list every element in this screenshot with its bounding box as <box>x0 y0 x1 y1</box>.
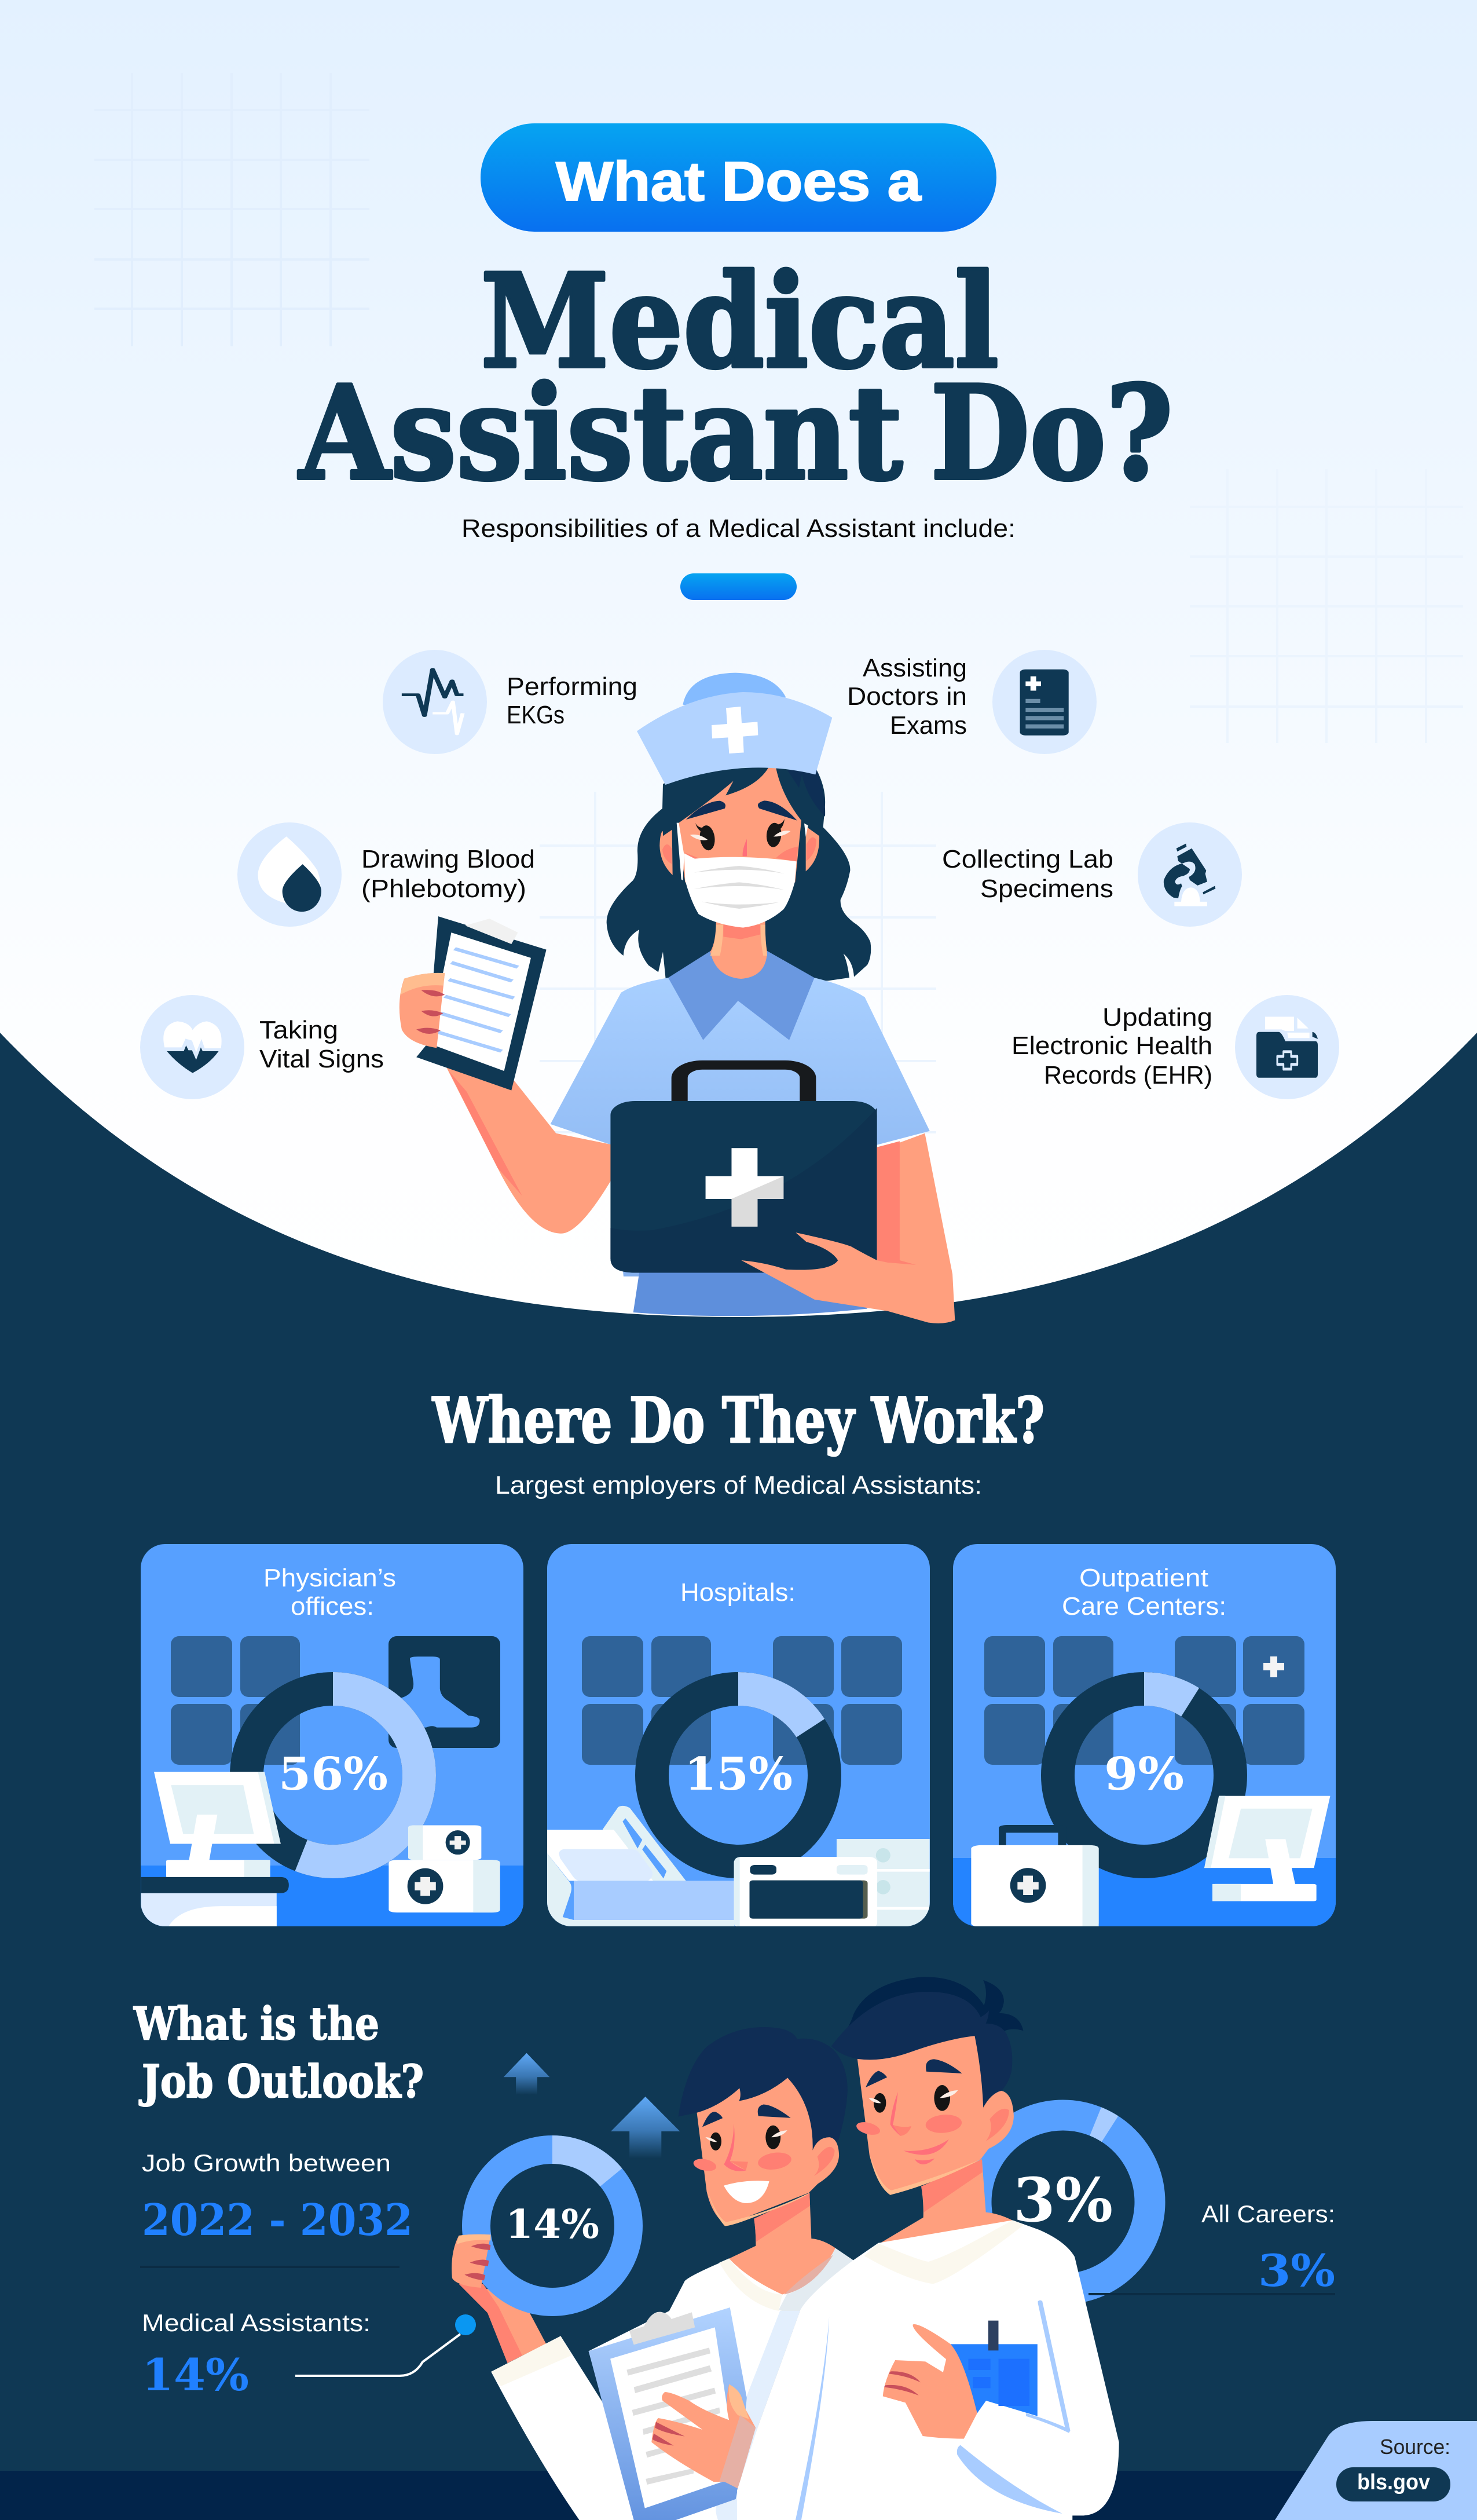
coat pocket and pen <box>951 2300 1070 2433</box>
donut chart 15% <box>652 1689 824 1861</box>
donut chart 3% <box>950 2089 1176 2315</box>
heading: What is the Job Outlook?: What is the <box>133 1998 379 2050</box>
nurse face <box>677 766 801 882</box>
title: Medical Assistant Do? <box>298 246 1173 509</box>
large arrow <box>611 2097 680 2159</box>
medical bag <box>610 1065 877 1272</box>
file tray <box>547 1806 735 1928</box>
label: Collecting Lab Specimens <box>942 845 1113 903</box>
nurse collar <box>668 951 815 1040</box>
left assistant sleeve <box>491 2336 636 2520</box>
source box <box>1275 2421 1477 2520</box>
panel label: Hospitals: Hospitals: <box>680 1578 796 1607</box>
label: Assisting Doctors in Exams: Doctors in <box>847 682 967 711</box>
title: Medical Assistant Do?: Medical <box>481 246 999 397</box>
value 9%: 9% <box>1104 1748 1184 1801</box>
title: Medical Assistant Do?: Assistant <box>298 357 903 509</box>
nurse hair <box>607 759 871 981</box>
label: Assisting Doctors in Exams: Exams <box>890 711 967 740</box>
panel: physician's offices <box>141 1544 523 1929</box>
foot x-ray picture <box>389 1636 500 1748</box>
label: Taking Vital Signs: Taking <box>259 1016 338 1044</box>
label: Performing EKGs: Performing <box>507 672 637 701</box>
small arrow <box>504 2053 549 2095</box>
connector line and dot <box>295 2314 476 2376</box>
donut chart 56% <box>247 1689 419 1861</box>
title: Medical Assistant Do?: Do? <box>930 357 1173 509</box>
nurse hat <box>637 673 832 785</box>
subtitle: Responsibilities of a Medical Assistant include: <box>461 514 1016 543</box>
value: 2022 - 2032: 2022 - 2032 <box>142 2195 413 2245</box>
heading: What is the Job Outlook?: Job Outlook? <box>139 2055 424 2108</box>
nurse ears <box>659 830 673 875</box>
nurse skirt <box>633 1270 867 1316</box>
value 15%: 15% <box>684 1748 793 1801</box>
filing cabinet <box>837 1839 930 1928</box>
nurse left arm <box>445 1064 613 1234</box>
donut chart 14% <box>476 2150 629 2302</box>
cross tile <box>1263 1656 1284 1677</box>
left assistant head, neck and chest <box>678 2027 848 2295</box>
donut chart 14%: 14% <box>505 2201 599 2248</box>
label: Collecting Lab Specimens: Collecting Lab <box>942 845 1113 873</box>
nurse illustration <box>400 673 955 1323</box>
office desk and monitor <box>141 1772 289 1926</box>
left assistant raised hand <box>452 2234 490 2288</box>
clipboard <box>589 2307 747 2520</box>
icon: collecting lab specimens <box>1138 822 1242 927</box>
label: Updating Electronic Health Records (EHR): Electronic Health <box>1011 1032 1212 1060</box>
icon: assisting doctors <box>992 650 1097 754</box>
source box: bls.gov <box>1357 2470 1430 2495</box>
panel label: Outpatient Care Centers <box>1062 1564 1226 1621</box>
medical bag <box>971 1825 1099 1927</box>
text: all careers: All Careers: <box>1201 2200 1335 2228</box>
icon: performing EKGs <box>383 650 487 754</box>
right assistant neck and head <box>831 1977 1025 2261</box>
heading pill: What Does a <box>481 123 996 232</box>
small accent pill <box>680 573 797 600</box>
label: Drawing Blood (Phlebotomy) <box>361 845 535 903</box>
panel label: Physician's offices: offices: <box>291 1592 374 1621</box>
source box: Source: <box>1380 2435 1450 2459</box>
label: Updating Electronic Health Records (EHR): Records (EHR) <box>1044 1061 1212 1089</box>
illustration: two medical assistants <box>452 1977 1119 2520</box>
panel label: Outpatient Care Centers: Care Centers: <box>1062 1592 1226 1621</box>
panel: outpatient care centers <box>953 1544 1336 1928</box>
heading: What is the Job Outlook? <box>133 1998 424 2108</box>
icon: updating EHR <box>1235 995 1339 1099</box>
left assistant forearm <box>459 2282 546 2363</box>
medical boxes <box>389 1825 500 1912</box>
left assistant holding hand <box>651 2384 756 2489</box>
subheading: largest employers: Largest employers of Medical Assistants: <box>495 1471 982 1499</box>
label: Taking Vital Signs: Vital Signs <box>259 1045 384 1073</box>
heading: Where Do They Work?: Where Do They Work? <box>432 1384 1044 1457</box>
label: Performing EKGs <box>507 672 637 729</box>
nurse neck and face <box>637 673 832 979</box>
text: job growth between: Job Growth between <box>142 2149 391 2177</box>
panel: hospitals <box>547 1544 930 1928</box>
donut chart 9% <box>1058 1689 1230 1861</box>
nurse clipboard <box>416 916 547 1091</box>
label: Assisting Doctors in Exams: Assisting <box>863 654 967 682</box>
donut chart 3%: 3% <box>1013 2164 1113 2236</box>
label: Drawing Blood (Phlebotomy): Drawing Blood <box>361 845 535 873</box>
label: Collecting Lab Specimens: Specimens <box>980 875 1113 903</box>
right assistant hand <box>883 2324 977 2439</box>
label: Performing EKGs: EKGs <box>507 701 565 729</box>
nurse right arm and hand <box>741 1133 955 1323</box>
label: Updating Electronic Health Records (EHR): Updating <box>1102 1003 1212 1032</box>
nurse eyes and brows <box>686 800 797 851</box>
icon: drawing blood <box>237 822 342 927</box>
right assistant coat <box>737 2220 1119 2520</box>
label: Drawing Blood (Phlebotomy): (Phlebotomy) <box>361 875 526 903</box>
text: medical assistants: Medical Assistants: <box>142 2309 371 2336</box>
printer <box>734 1857 877 1928</box>
panel label: Outpatient Care Centers: Outpatient <box>1079 1564 1208 1592</box>
computer monitor <box>1204 1796 1330 1901</box>
icon: taking vital signs <box>140 995 244 1099</box>
nurse hand <box>400 973 445 1048</box>
arrows up <box>504 2053 680 2159</box>
nurse face mask <box>684 853 797 928</box>
value: 3%: 3% <box>1258 2245 1335 2296</box>
label: Taking Vital Signs <box>259 1016 384 1073</box>
panel label: Physician's offices <box>263 1564 396 1621</box>
value 56%: 56% <box>278 1748 388 1801</box>
nurse shirt <box>551 978 930 1277</box>
left assistant coat <box>589 2248 854 2520</box>
label: Assisting Doctors in Exams <box>847 654 967 740</box>
heading pill: What Does a: What Does a <box>556 151 922 213</box>
panel label: Physician's offices: Physician’s <box>263 1564 396 1592</box>
value: 14%: 14% <box>142 2349 249 2401</box>
label: Updating Electronic Health Records (EHR) <box>1011 1003 1212 1089</box>
